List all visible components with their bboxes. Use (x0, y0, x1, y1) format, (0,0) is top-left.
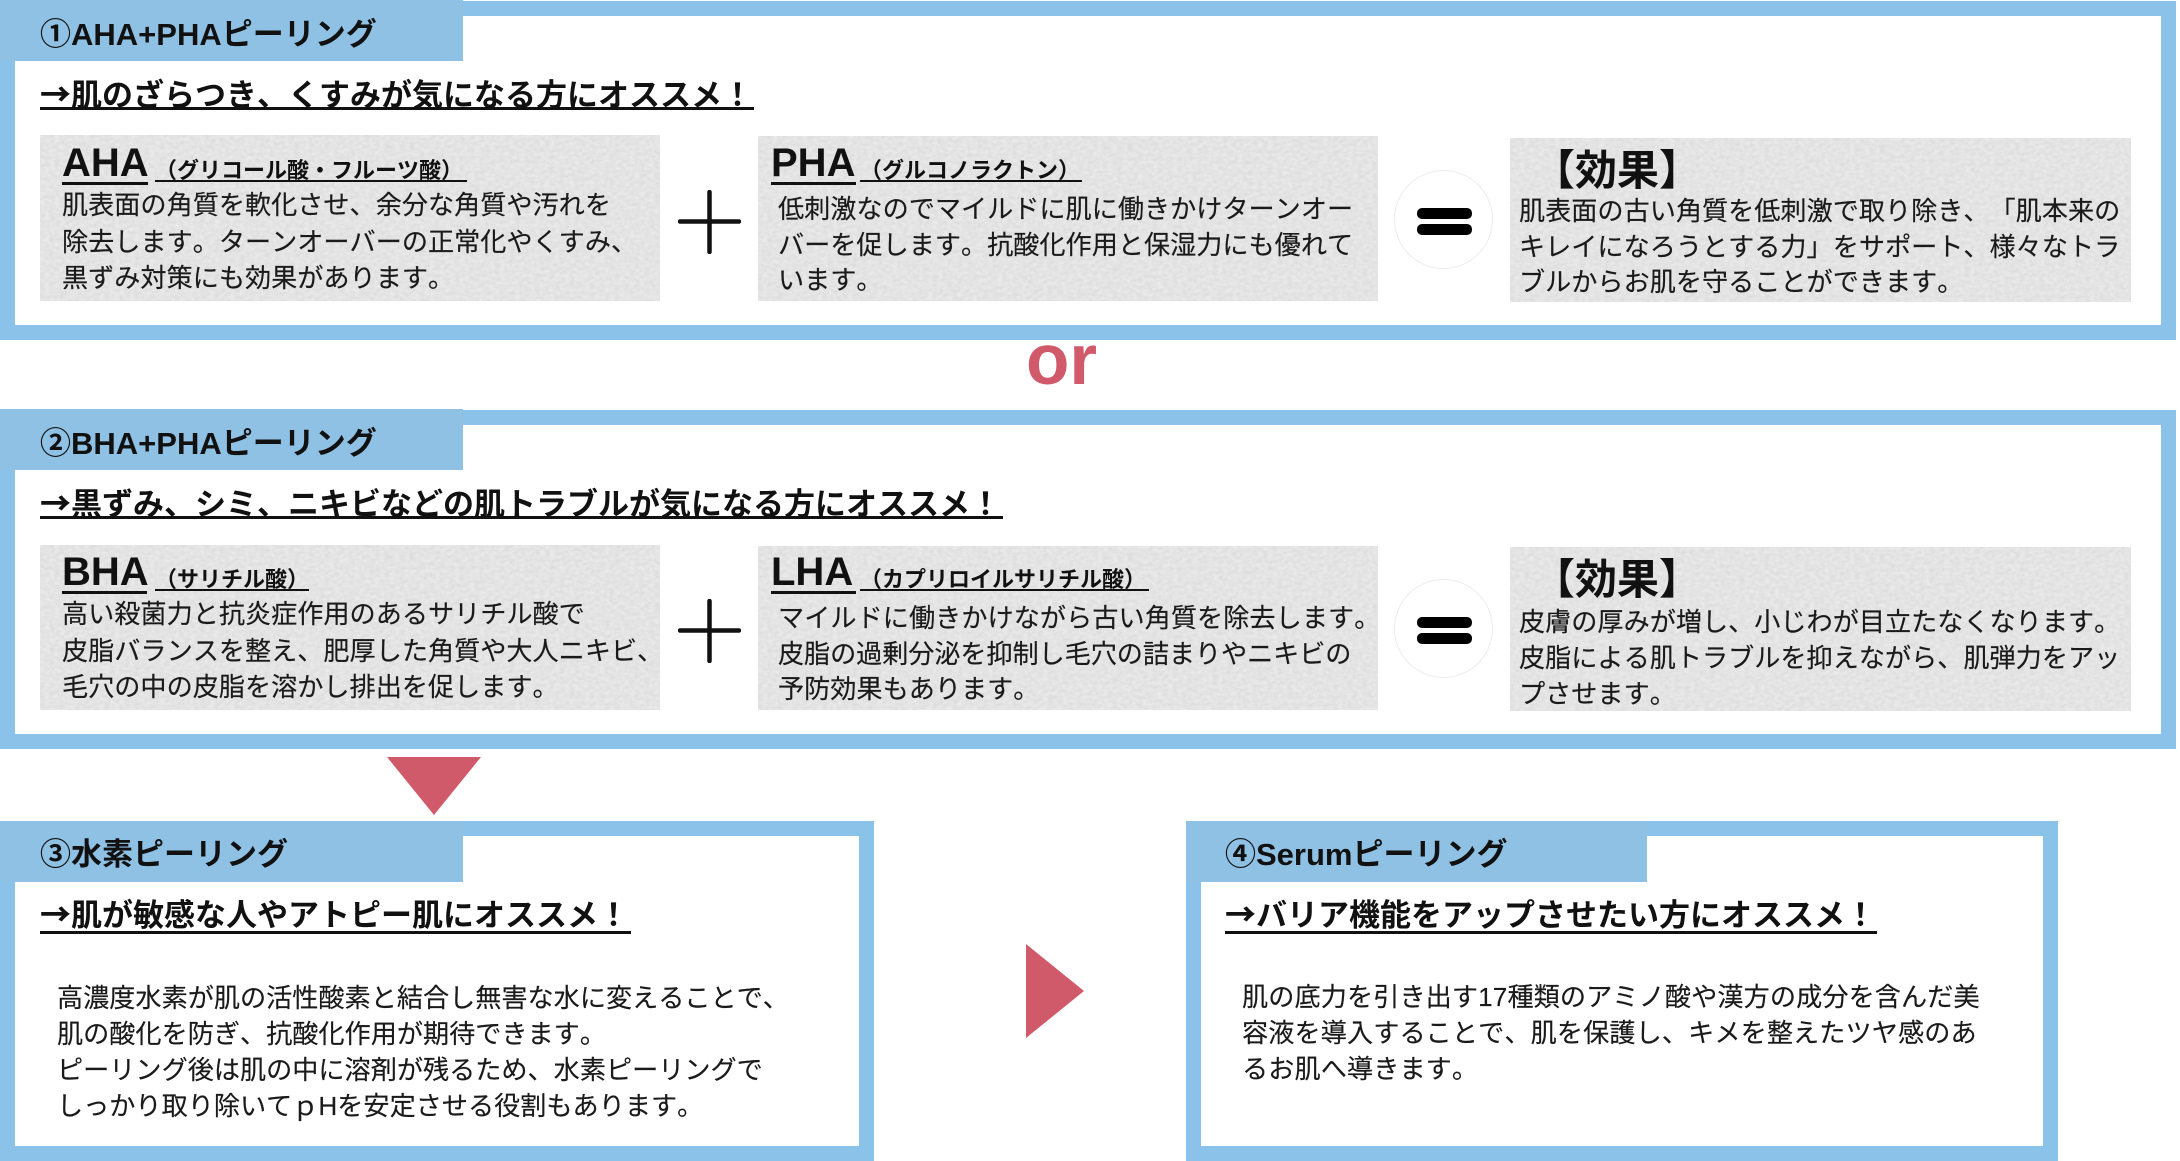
PHA description (778, 194, 1353, 295)
card: AHA (40, 135, 660, 301)
BHA description (62, 599, 663, 702)
BHA description: 毛穴の中の皮脂を溶かし排出を促します。 (62, 672, 559, 702)
arrow: down triangle (387, 757, 481, 815)
recommendation line: →肌のざらつき、くすみが気になる方にオススメ！ (40, 70, 753, 115)
card: effect (1510, 138, 2131, 302)
connector text: or: or (1026, 321, 1097, 400)
effect heading: 【効果】 (1533, 556, 1701, 603)
BHA description: 皮脂バランスを整え、肥厚した角質や大人ニキビ、 (62, 636, 663, 666)
heading tab: hydrogen: ③水素ピーリング (40, 837, 288, 872)
panel: BHA+PHA peeling (0, 409, 2176, 749)
PHA subtitle: （グルコノラクトン） (860, 158, 1080, 183)
hydrogen description: しっかり取り除いてｐHを安定させる役割もあります。 (57, 1091, 703, 1121)
recommendation line: →黒ずみ、シミ、ニキビなどの肌トラブルが気になる方にオススメ！ (40, 479, 1001, 524)
card: PHA (758, 136, 1378, 301)
heading tab: AHA+PHA: ①AHA+PHAピーリング (40, 17, 377, 52)
panel: hydrogen peeling (0, 821, 874, 1161)
effect description: プさせます。 (1519, 679, 1676, 709)
BHA description: 高い殺菌力と抗炎症作用のあるサリチル酸で (62, 599, 585, 629)
LHA description: 予防効果もあります。 (778, 674, 1039, 704)
recommendation line: →肌が敏感な人やアトピー肌にオススメ！ (40, 890, 629, 935)
hydrogen description: ピーリング後は肌の中に溶剤が残るため、水素ピーリングで (57, 1055, 763, 1085)
icon: equals (1394, 579, 1493, 678)
PHA name: PHA (771, 141, 855, 185)
card: LHA (758, 546, 1378, 710)
heading tab: BHA+PHA (0, 409, 463, 470)
AHA name: AHA (62, 141, 149, 185)
LHA subtitle: （カプリロイルサリチル酸） (860, 567, 1146, 592)
AHA description: 黒ずみ対策にも効果があります。 (62, 263, 454, 293)
effect description: 皮脂による肌トラブルを抑えながら、肌弾力をアッ (1519, 643, 2120, 673)
LHA description: 皮脂の過剰分泌を抑制し毛穴の詰まりやニキビの (778, 638, 1351, 668)
effect description: キレイになろうとする力」をサポート、様々なトラ (1519, 232, 2120, 262)
AHA description: 肌表面の角質を軟化させ、余分な角質や汚れを (62, 190, 611, 220)
BHA subtitle: （サリチル酸） (155, 567, 309, 592)
heading tab: Serum (1186, 821, 1647, 882)
effect description (1519, 196, 2120, 297)
BHA name: BHA (62, 550, 149, 594)
icon: plus (678, 599, 741, 663)
PHA description: バーを促します。抗酸化作用と保湿力にも優れて (778, 230, 1353, 260)
Serum description: るお肌へ導きます。 (1242, 1054, 1478, 1084)
card: effect (1510, 547, 2131, 711)
LHA description (778, 603, 1380, 704)
arrow: right triangle (1026, 944, 1084, 1038)
recommendation line: →バリア機能をアップさせたい方にオススメ！ (1225, 890, 1876, 935)
effect description: 肌表面の古い角質を低刺激で取り除き、「肌本来の (1519, 196, 2120, 226)
PHA description: います。 (778, 265, 883, 295)
panel: AHA+PHA peeling (0, 0, 2176, 340)
icon: plus (678, 190, 741, 254)
Serum description (1242, 982, 1980, 1084)
effect heading: 【効果】 (1533, 147, 1701, 194)
icon: equals (1394, 170, 1493, 269)
PHA description: 低刺激なのでマイルドに肌に働きかけターンオー (778, 194, 1353, 224)
card: BHA (40, 545, 660, 710)
AHA description: 除去します。ターンオーバーの正常化やくすみ、 (62, 226, 637, 256)
Serum description: 容液を導入することで、肌を保護し、キメを整えたツヤ感のあ (1242, 1018, 1977, 1048)
heading tab: Serum: ④Serumピーリング (1225, 837, 1507, 872)
AHA subtitle: （グリコール酸・フルーツ酸） (155, 158, 463, 183)
AHA description (62, 190, 637, 293)
hydrogen description: 高濃度水素が肌の活性酸素と結合し無害な水に変えることで、 (57, 983, 789, 1013)
hydrogen description: 肌の酸化を防ぎ、抗酸化作用が期待できます。 (57, 1019, 606, 1049)
heading tab: BHA+PHA: ②BHA+PHAピーリング (40, 426, 377, 461)
heading tab: AHA+PHA (0, 0, 463, 61)
effect description: ブルからお肌を守ることができます。 (1519, 267, 1963, 297)
panel: Serum peeling (1186, 821, 2058, 1161)
LHA description: マイルドに働きかけながら古い角質を除去します。 (778, 603, 1380, 633)
heading tab: hydrogen (0, 821, 463, 882)
effect description (1519, 607, 2120, 709)
Serum description: 肌の底力を引き出す17種類のアミノ酸や漢方の成分を含んだ美 (1242, 982, 1980, 1012)
hydrogen description (57, 983, 789, 1122)
effect description: 皮膚の厚みが増し、小じわが目立たなくなります。 (1519, 607, 2120, 637)
LHA name: LHA (771, 550, 853, 594)
